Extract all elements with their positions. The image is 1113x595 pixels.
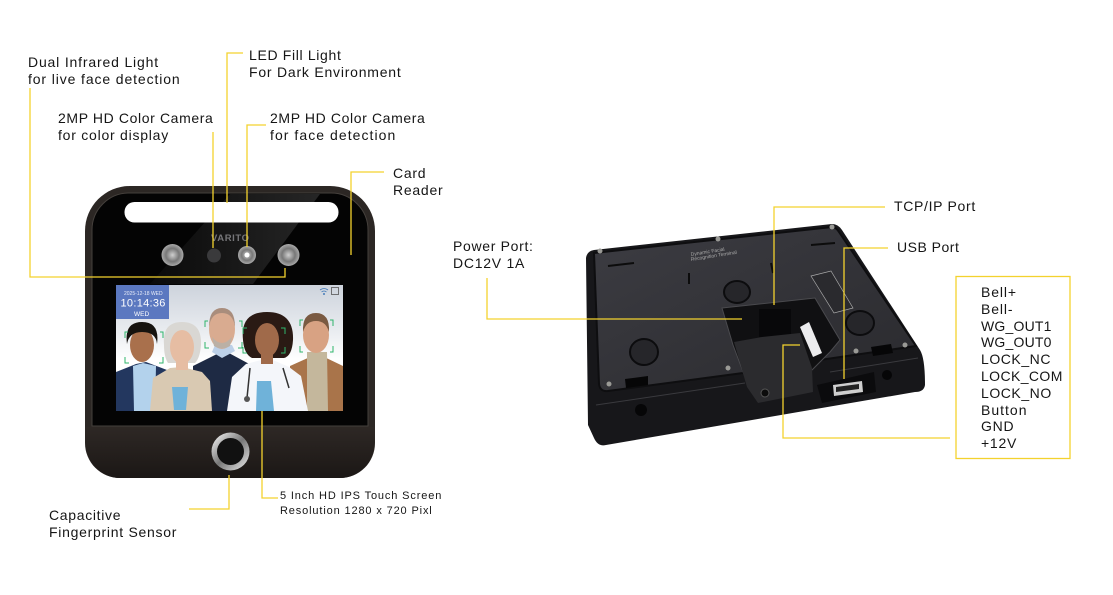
glass front panel: [92, 193, 368, 426]
label: touch screen: 5 Inch HD IPS Touch Screen: [280, 490, 442, 502]
notches and slots: [625, 344, 893, 416]
person 1: [116, 322, 169, 411]
person 3: [193, 308, 253, 411]
glass reflection: [150, 194, 320, 284]
network port: [759, 309, 791, 337]
label: face detection camera: 2MP HD Color Camera: [270, 110, 425, 126]
infrared light left: [162, 244, 184, 266]
clock panel: 2025-12-18 WED: [124, 291, 163, 297]
label: card reader: Reader: [393, 182, 443, 198]
label: USB port: USB Port: [897, 239, 959, 255]
wiring list: GND: [981, 418, 1014, 434]
front device: [85, 186, 375, 478]
wiring list: LOCK_NC: [981, 351, 1051, 367]
touch screen: [116, 285, 343, 411]
person 5: [290, 313, 343, 411]
slots: [608, 243, 835, 284]
fingerprint sensor: [212, 432, 250, 470]
wiring list: WG_OUT1: [981, 318, 1052, 334]
label: face detection camera: for face detection: [270, 127, 396, 143]
face detection camera: [238, 246, 256, 264]
clock panel: [116, 285, 169, 319]
rear device: [586, 224, 925, 445]
label: power port: DC12V 1A: [453, 255, 525, 271]
device body: [85, 186, 375, 478]
rear body side: [586, 224, 925, 445]
terminal connector: [800, 322, 822, 357]
label: LED fill light: LED Fill Light: [249, 47, 342, 63]
wiring list: Button: [981, 402, 1027, 418]
cable cover: [734, 333, 813, 403]
brand logo: VARITO: [211, 233, 250, 244]
person 2: [150, 322, 212, 411]
wiring list: LOCK_NO: [981, 385, 1052, 401]
side ledge line: [596, 358, 918, 405]
label: dual infrared light: Dual Infrared Light: [28, 54, 159, 70]
label: color display camera: 2MP HD Color Camera: [58, 110, 213, 126]
screen background: [116, 285, 343, 411]
mounting feet: [630, 281, 874, 365]
lower brushed band: [86, 427, 374, 478]
USB port: [817, 372, 876, 403]
wiring sticker: [811, 271, 853, 313]
color camera: [207, 248, 221, 262]
rear plate: [594, 227, 916, 391]
wiring list: +12V: [981, 435, 1017, 451]
wiring list: Bell-: [981, 301, 1013, 317]
label: power port: Power Port:: [453, 238, 534, 254]
label: TCP/IP port: TCP/IP Port: [894, 198, 976, 214]
label: touch screen: Resolution 1280 x 720 Pixl: [280, 505, 433, 517]
cover screw: [761, 389, 769, 397]
status icons: [320, 288, 338, 295]
port recess: [722, 298, 840, 385]
wiring list: LOCK_COM: [981, 368, 1063, 384]
wiring list box: [956, 276, 1070, 458]
infrared light right: [278, 244, 300, 266]
label: dual infrared light: for live face detection: [28, 71, 181, 87]
leader lines: [30, 53, 950, 509]
label: LED fill light: For Dark Environment: [249, 64, 402, 80]
rear label: Recognition Terminal: [690, 250, 737, 263]
face detection frames: [125, 320, 333, 363]
wiring list: Bell+: [981, 284, 1017, 300]
label: fingerprint sensor: Fingerprint Sensor: [49, 524, 177, 540]
clock panel: WED: [134, 311, 149, 318]
wiring list: WG_OUT0: [981, 334, 1052, 350]
clock panel: 10:14:36: [120, 298, 166, 310]
screws: [598, 224, 908, 386]
LED fill light bar: [124, 202, 338, 222]
label: color display camera: for color display: [58, 127, 169, 143]
label: card reader: Card: [393, 165, 426, 181]
person 4 doctor: [227, 312, 308, 411]
label: fingerprint sensor: Capacitive: [49, 507, 121, 523]
rear label: Dynamic Facial: [690, 247, 725, 258]
